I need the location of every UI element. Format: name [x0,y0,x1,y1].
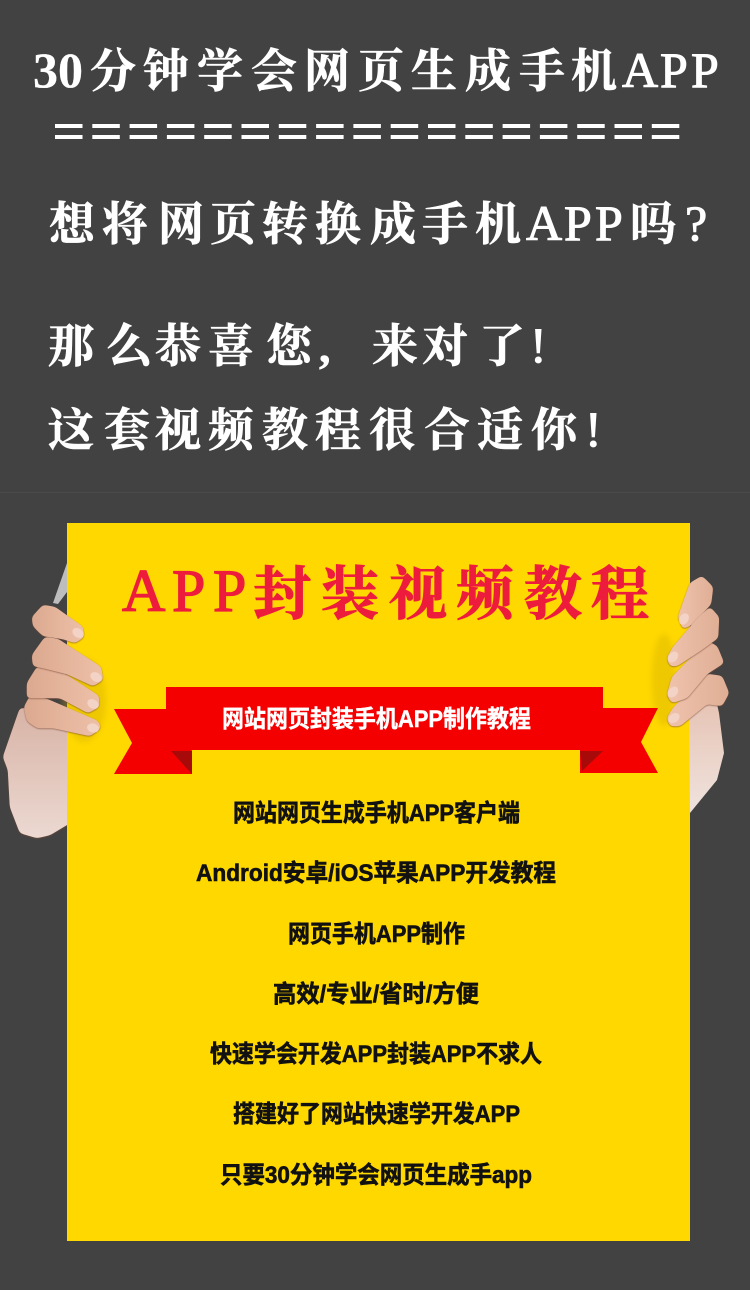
finger shadow [62,634,676,742]
poster heading: APP [122,558,246,624]
double-line divider [55,126,681,137]
icon: left arm and paper corner [3,563,70,838]
feature list: 搭建好了网站快速学开发APP [233,1101,520,1128]
feature list: 快速学会开发APP封装APP不求人 [210,1041,542,1068]
feature list [196,799,556,1189]
title: APP [622,42,719,98]
icon: right hand [666,576,729,726]
feature list: 网页手机APP制作 [288,921,465,948]
congratulation line: ! [530,317,547,373]
icon: left hand [24,605,103,736]
icon: right arm [689,695,724,813]
title: 分钟学会网页生成手机 [90,46,617,97]
ribbon text: 网站网页封装手机APP制作教程 [222,706,531,733]
feature list: 只要30分钟学会网页生成手app [220,1162,532,1189]
question heading: 想将网页转换成手机 [49,199,521,250]
question heading: APP [526,195,623,251]
poster panel [67,523,690,1241]
feature list: 网站网页生成手机APP客户端 [233,799,520,827]
suitability line: ! [585,401,602,457]
feature list: 高效/专业/省时/方便 [273,980,479,1008]
ribbon banner [114,687,658,774]
congratulation line: 那么恭喜您,来对了 [48,321,525,372]
question heading: ? [685,195,707,251]
feature list: Android安卓/iOS苹果APP开发教程 [196,860,556,887]
suitability line: 这套视频教程很合适你 [48,405,581,456]
question heading: 吗 [630,199,676,250]
title: 30 [33,42,83,98]
poster heading: 封装视频教程 [253,562,649,627]
